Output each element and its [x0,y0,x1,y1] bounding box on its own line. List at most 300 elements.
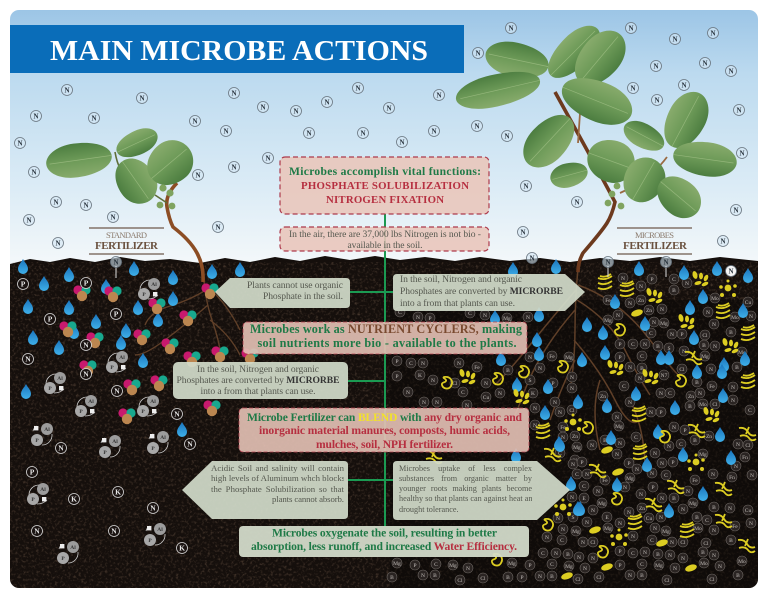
right soil element badges: Mg [565,355,573,361]
right soil element badges: N [484,381,488,387]
right soil element badges: N [570,375,574,381]
right soil element badges: P [580,460,584,466]
label: microbes fertilizer [617,228,692,254]
sky nitrogen badges: N [720,238,726,246]
right soil element badges: Mg [604,318,612,324]
right soil element badges: N [457,361,461,367]
arrow box: plants cannot use: Plants cannot use organic [247,280,343,291]
left soil element badges: N [114,386,120,396]
left soil element badges: N [187,440,193,448]
sky nitrogen badges: N [672,36,678,44]
right soil element badges: N [591,508,595,514]
right soil element badges: C [560,538,564,544]
aluminum phosphate pairs: P [142,292,146,298]
right soil element badges: N [728,506,732,512]
band: nutrient cyclers [243,322,527,354]
sky nitrogen badges: N [215,224,221,232]
right soil element badges: P [651,485,655,491]
sky nitrogen badges: N [324,98,330,106]
right soil element badges: N [526,315,530,321]
right soil element badges: C [582,484,586,490]
sky nitrogen badges: N [523,182,529,190]
right soil element badges: N [685,281,689,287]
right soil element badges: N [668,553,672,559]
right soil element badges: Cl [664,578,670,584]
right soil element badges: B [736,573,740,579]
left soil element badges [18,278,196,554]
sky nitrogen badges: N [139,94,145,102]
aluminum phosphate pairs: P [31,497,35,503]
sky nitrogen badges: N [728,68,734,76]
right soil element badges: Mo [738,559,746,565]
right soil element badges: Mo [700,561,708,567]
right soil element badges: Mg [572,529,580,535]
sky nitrogen badges: N [55,240,61,248]
right soil element badges: N [639,492,643,498]
right soil element badges: B [640,573,644,579]
right soil element badges: N [734,464,738,470]
right soil element badges: N [466,566,470,572]
right soil element badges: N [628,400,632,406]
right soil element badges: N [431,378,435,384]
right soil element badges: Cl [680,540,686,546]
soil line nitrogen pins: N [605,258,611,266]
aluminum phosphate pairs: Al [157,527,163,533]
left soil element badges: P [84,278,89,288]
right soil element badges: Mg [626,476,634,482]
right soil element badges: N [465,403,469,409]
sky nitrogen badges: N [654,96,660,104]
sky nitrogen badges: N [355,84,361,92]
right soil element badges: N [421,361,425,367]
right soil element badges: N [416,315,420,321]
right soil element badges: B [695,380,699,386]
aluminum phosphate pairs [27,278,169,564]
sky nitrogen badges: N [195,172,201,180]
right soil element badges: N [731,385,735,391]
arrow box: microbes uptake: substances from organic matter by [399,474,532,483]
right soil element badges: C [541,551,545,557]
sky nitrogen badges: N [431,128,437,136]
arrow box: microbes uptake: Microbes uptake of less complex [399,464,532,473]
left soil element badges: P [21,280,26,288]
right soil element badges: Mg [655,563,663,569]
right soil element badges: Mo [731,315,739,321]
right soil element badges: Mg [615,424,623,430]
right soil element badges: C [650,538,654,544]
right soil element badges: N [570,495,574,501]
right soil element badges: Mg [508,561,516,567]
aluminum phosphate pairs: Al [112,439,118,445]
right soil element badges: N [653,451,657,457]
arrow box: acidic soil [182,461,348,519]
sky nitrogen badges [14,22,748,248]
right soil element badges: N [749,314,753,320]
sky nitrogen badges: N [223,128,229,136]
right soil element badges: P [551,381,555,387]
arrow box: acidic soil: Acidic Soil and salinity will contain [211,463,344,473]
right soil element badges: C [748,408,752,414]
right soil element badges: C [664,473,668,479]
right soil element badges: B [656,344,660,350]
right soil element badges: Fe [560,425,566,431]
right soil element badges: C [575,472,579,478]
standard plant [44,123,203,282]
sky nitrogen badges: N [736,106,742,114]
right soil element badges: N [672,425,676,431]
box: nitrogen converted left: into a from that plants can use. [200,386,316,397]
right soil element badges: Fe [549,354,555,360]
right soil element badges: N [545,535,549,541]
right soil element badges: N [421,573,425,579]
right soil element badges: N [561,435,565,441]
band: fertilizer blend: mulches, soil, NPH fertilizer. [316,438,453,451]
left soil drops [18,259,245,437]
aluminum phosphate pairs: Al [88,399,94,405]
band: oxygenate the soil: absorption, less runoff, and increased Water Efficiency. [251,540,517,553]
right soil element badges: Cl [452,381,458,387]
right soil element badges: Cl [457,578,463,584]
left soil element badges: N [111,526,117,536]
right soil element badges: N [659,515,663,521]
right soil element badges: Fe [605,298,611,304]
aluminum phosphate pairs: P [48,386,52,392]
right soil element badges: N [422,400,426,406]
right soil element badges: Cu [483,395,489,401]
right soil element badges: S [667,346,671,352]
right soil element badges: B [550,574,554,580]
right soil element badges: B [729,330,733,336]
right soil element badges: Zn [688,394,694,400]
aluminum phosphate pairs: Al [151,282,157,288]
right soil element badges: P [683,428,687,434]
right soil element badges: P [520,575,524,581]
right soil element badges: Zn [638,298,644,304]
right soil element badges: C [634,435,638,441]
right soil element badges: N [670,540,674,546]
right soil element badges: N [670,332,674,338]
right soil element badges: E [605,515,609,521]
right soil element badges: C [631,342,635,348]
right soil element badges: C [679,442,683,448]
right soil element badges: C [409,361,413,367]
sky nitrogen badges: N [192,118,198,126]
soil line nitrogen pins [110,252,736,278]
aluminum phosphate pairs: Al [44,427,50,433]
right soil element badges: N [616,313,620,319]
aluminum phosphate pairs: P [61,556,65,562]
arrow box: acidic soil: high levels of Aluminum whch blocks [211,473,344,483]
right soil element badges: N [590,443,594,449]
sky nitrogen badges: N [17,140,23,148]
right soil element badges: S [571,515,575,521]
right soil element badges: C [631,551,635,557]
right soil element badges: B [729,538,733,544]
right soil element badges: N [673,566,677,572]
aluminum phosphate pairs: P [79,409,83,415]
right soil element badges: N [533,423,537,429]
right soil element badges: N [649,410,653,416]
right soil element badges: N [686,489,690,495]
right soil element badges: N [667,444,671,450]
left soil element badges: K [179,544,185,552]
sky nitrogen badges: N [436,92,442,100]
right soil element badges: B [702,343,706,349]
box: vital functions: Microbes accomplish vital functions: [289,165,481,178]
right soil element badges: Mg [573,445,581,451]
right soil element badges: Mg [701,354,709,360]
right soil element badges: N [591,556,595,562]
soil line nitrogen pins: N [113,258,119,266]
right soil element badges: B [693,438,697,444]
right soil element badges: C [468,311,472,317]
right soil element badges: N [711,472,715,478]
sky background [10,10,758,266]
soil line nitrogen pins: N [529,254,535,262]
sky nitrogen badges: N [504,132,510,140]
arrow box: acidic soil: the Phosphate Solubilization so that [211,484,344,494]
label: microbes fertilizer: FERTILIZER [623,240,688,252]
roots: microbes plant [495,268,680,470]
right soil element badges: N [558,410,562,416]
box: vital functions [280,157,489,214]
right soil element badges: N [498,391,502,397]
right soil element badges: N [643,550,647,556]
right soil element badges: Cu [646,516,652,522]
right soil element badges: B [701,550,705,556]
right soil element badges: N [681,507,685,513]
band: nutrient cyclers: Microbes work as NUTRIENT CYCLERS, making [250,322,522,336]
right soil element badges: Cu [745,300,751,306]
label: standard fertilizer [89,228,164,254]
sky nitrogen badges: N [265,154,271,162]
right soil element badges: N [706,310,710,316]
right soil element badges: Fe [692,478,698,484]
right soil element badges [387,273,757,585]
sky nitrogen badges: N [508,24,514,32]
right soil element badges: N [660,307,664,313]
sky nitrogen badges: N [231,164,237,172]
sky nitrogen badges: N [574,198,580,206]
aluminum phosphate pairs: P [103,450,107,456]
right soil element badges: N [538,366,542,372]
right soil element badges: N [553,400,557,406]
right soil element badges: N [712,322,716,328]
green connector lines [348,214,393,526]
right soil element badges: Mg [449,563,457,569]
right soil element badges: P [680,332,684,338]
sky nitrogen badges: N [110,214,116,222]
box: nitrogen in the air: In the air, there are 37,000 lbs Nitrogen is not bio - [289,229,481,240]
right soil element badges: N [628,573,632,579]
right soil element badges: B [506,575,510,581]
right soil element badges: Zn [600,394,606,400]
band: oxygenate the soil [239,526,529,557]
right soil element badges: N [483,313,487,319]
right soil element badges: N [638,376,642,382]
right soil element badges: Fe [709,384,715,390]
right soil element badges: Mo [694,526,702,532]
aluminum phosphate pairs: Al [70,545,76,551]
left soil element badges: N [150,504,156,512]
box: vital functions: PHOSPHATE SOLUBILIZATION [301,180,469,192]
right soil element badges: B [506,368,510,374]
right soil element badges: Cl [679,367,685,373]
right soil element badges: Fn [742,455,748,461]
right soil element badges: B [603,438,607,444]
right soil element badges: N [435,400,439,406]
right soil element badges: N [639,284,643,290]
right soil element badges: Cl [590,540,596,546]
box: nitrogen converted left [173,362,348,399]
right soil element badges: Zn [706,434,712,440]
right soil element badges: P [395,374,399,380]
right soil element badges: N [635,467,639,473]
right soil element badges: Cl [703,541,709,547]
right soil element badges: N [736,442,740,448]
right soil element badges: N [533,406,537,412]
box: nitrogen in the air: available in the soil. [348,240,422,251]
right soil drops [490,259,753,518]
aluminum phosphate pairs: Al [160,435,166,441]
right soil element badges: Mg [503,316,511,322]
right soil element badges: P [618,563,622,569]
right soil element badges: N [406,390,410,396]
arrow box: microbes uptake [393,461,570,520]
left soil element badges: K [115,488,121,496]
right soil element badges: P [528,563,532,569]
right soil element badges: N [577,555,581,561]
sky nitrogen badges: N [681,82,687,90]
right soil element badges: N [643,342,647,348]
right soil element badges: N [585,472,589,478]
right soil element badges: C [668,391,672,397]
sky nitrogen badges: N [91,114,97,122]
right soil element badges: P [413,563,417,569]
roots: standard plant [135,281,240,356]
sky nitrogen badges: N [231,90,237,98]
right soil element badges: P [671,460,675,466]
left soil element badges: N [25,354,31,364]
title banner [10,25,464,73]
right soil element badges: Fn [729,475,735,481]
soil background [10,256,758,590]
right soil element badges: Cl [575,577,581,583]
right soil element badges: B [433,573,437,579]
sky nitrogen badges: N [306,130,312,138]
right soil element badges: C [558,451,562,457]
right soil element badges: N [618,521,622,527]
right soil element badges: N [571,462,575,468]
right soil element badges: Cl [596,575,602,581]
left soil element badges: N [83,370,89,378]
soil line nitrogen pins: N [728,268,734,276]
soil line nitrogen pins: N [663,258,669,266]
arrow box: plants cannot use [215,278,350,308]
sky nitrogen badges: N [83,202,89,210]
sky nitrogen badges: N [739,150,745,158]
right soil element badges: Cl [480,576,486,582]
band: fertilizer blend: Microbe Fertilizer can BLEND with any dry organic and [247,411,523,424]
right soil element badges: N [713,344,717,350]
right soil element badges: B [735,365,739,371]
right soil element badges: Cl [702,333,708,339]
label: standard fertilizer: FERTILIZER [95,240,159,252]
aluminum phosphate pairs: P [141,409,145,415]
aluminum phosphate pairs: Al [40,487,46,493]
yellow microbes [425,271,756,581]
left soil element badges: N [34,526,40,536]
right soil element badges: B [672,496,676,502]
left soil element badges: N [83,340,89,350]
right soil element badges: N [528,355,532,361]
sky nitrogen badges: N [628,24,634,32]
aluminum phosphate pairs: Al [150,399,156,405]
right soil element badges: Cl [569,408,575,414]
left soil element badges: P [114,310,119,318]
sky nitrogen badges: N [31,168,37,176]
right soil element badges: N [698,391,702,397]
right soil element badges: N7 [661,373,668,379]
box: vital functions: NITROGEN FIXATION [326,194,444,206]
right soil element badges: P [618,355,622,361]
right soil element badges: N [621,276,625,282]
right soil element badges: C [640,354,644,360]
aluminum phosphate pairs: Al [119,355,125,361]
right soil element badges: S [528,378,532,384]
left soil element badges: N [174,410,180,418]
right soil element badges: Mo [699,402,707,408]
arrow box: nitrogen converted right: Phosphates are converted by MICRORBE [400,286,563,297]
right soil element badges: N [652,320,656,326]
right soil element badges: Zn [572,434,578,440]
microbes plant [453,17,739,272]
right soil element badges: N [573,458,577,464]
band: oxygenate the soil: Microbes oxygenate the soil, resulting in better [272,526,497,540]
right soil element badges: N [585,520,589,526]
right soil element badges: N [628,365,632,371]
box: nitrogen converted left: In the soil, Nitrogen and organic [197,364,319,375]
right soil element badges: N [631,534,635,540]
right soil element badges: P [659,410,663,416]
aluminum phosphate pairs: P [148,538,152,544]
sky nitrogen badges: N [710,30,716,38]
sky nitrogen badges: N [630,84,636,92]
right soil element badges: Mg [393,561,401,567]
label: microbes fertilizer: MICROBES [635,230,674,240]
right soil element badges: P [395,359,399,365]
right soil element badges: N [749,521,753,527]
sky nitrogen badges: N [64,86,70,94]
right soil element badges: N [682,349,686,355]
sky nitrogen badges: N [520,228,526,236]
right soil element badges: N [628,301,632,307]
aluminum phosphate pairs: P [110,365,114,371]
phosphate clusters [59,283,259,424]
left soil element badges: K [71,494,77,504]
right soil element badges: N [581,540,585,546]
sky nitrogen badges: N [399,138,405,146]
right soil element badges: N [618,441,622,447]
arrow box: microbes uptake: drought tolerance. [399,505,459,514]
right soil element badges: B [688,404,692,410]
arrow box: acidic soil: plants cannot absorb. [272,494,344,504]
right soil element badges: N [660,461,664,467]
right soil element badges: K [531,391,535,397]
left soil element badges: N [58,444,64,452]
right soil element badges: Zn [646,308,652,314]
right soil element badges: P [627,461,631,467]
